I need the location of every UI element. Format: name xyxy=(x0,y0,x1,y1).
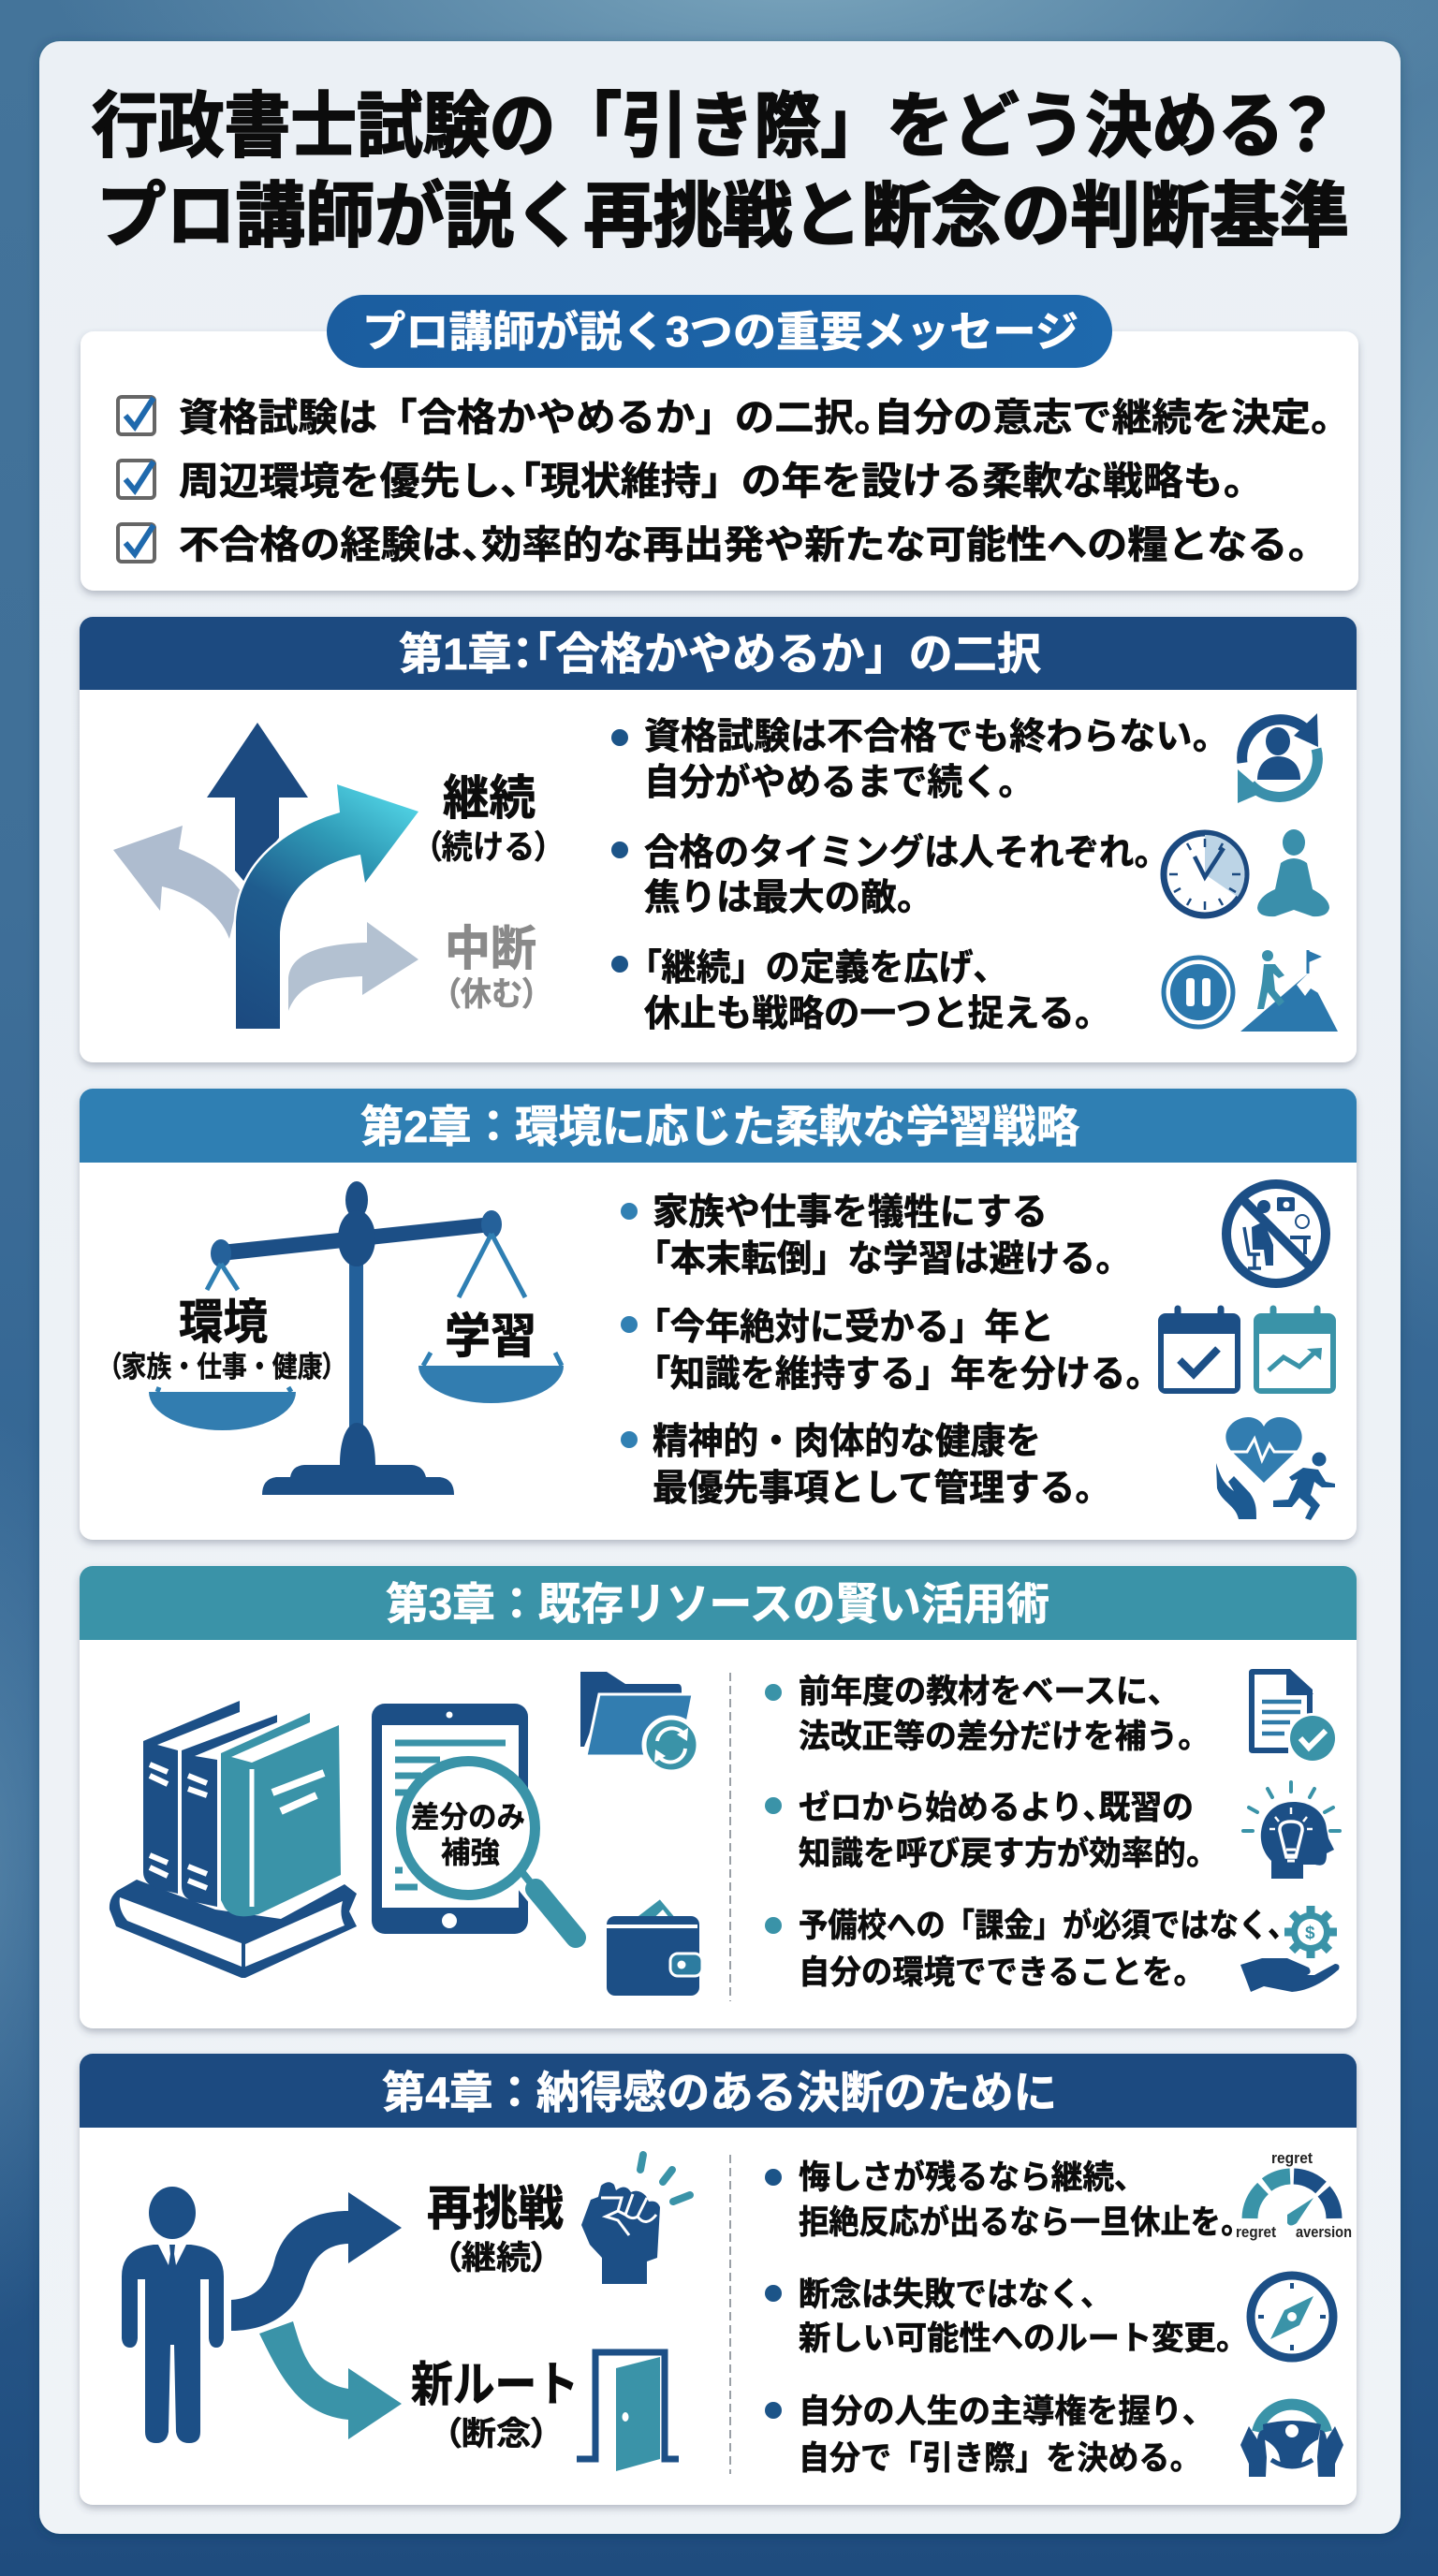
label: continue: （続ける） xyxy=(426,829,550,866)
chapter 1 card xyxy=(80,617,1357,1062)
icon: cycle person xyxy=(1238,713,1318,803)
label: pause xyxy=(445,922,538,1013)
bullet 3: 自分の人生の主導権を握り、 xyxy=(799,2393,1198,2430)
chapter 2 header: 第2章：環境に応じた柔軟な学習戦略 xyxy=(360,1102,1079,1151)
chapter 4 card xyxy=(80,2054,1357,2505)
label: retry xyxy=(427,2182,564,2276)
arrow: new route xyxy=(259,2321,402,2439)
bullet 1: 家族や仕事を犠牲にする xyxy=(653,1193,1048,1233)
bullet 1 xyxy=(765,2159,1236,2241)
icon: no sacrifice sign xyxy=(1226,1184,1326,1283)
chapter 2 header xyxy=(80,1089,1357,1163)
bullet 3 xyxy=(611,948,1093,1034)
icon: document check xyxy=(1249,1669,1338,1764)
bullet 2: 「今年絶対に受かる」年と xyxy=(653,1308,1054,1348)
bullet 3: 「継続」の定義を広げ、 xyxy=(644,948,990,988)
icon: wallet xyxy=(607,1898,702,1996)
chapter 1 header xyxy=(80,617,1357,690)
bullet 1: 「本末転倒」な学習は避ける。 xyxy=(653,1239,1113,1280)
bullet 1: 悔しさが残るなら継続、 xyxy=(799,2159,1130,2196)
label: new route: （断念） xyxy=(444,2416,549,2452)
chapter 3 card xyxy=(80,1566,1357,2028)
bullet 2: 知識を呼び戻す方が効率的。 xyxy=(799,1836,1202,1872)
bullet 2: 「知識を維持する」年を分ける。 xyxy=(653,1354,1143,1395)
panel: key messages xyxy=(81,295,1358,591)
label: environment: 環境 xyxy=(179,1295,268,1349)
label: retry: （継続） xyxy=(444,2240,549,2276)
bullet 3: 精神的・肉体的な健康を xyxy=(653,1422,1041,1462)
panel: chapter 2 xyxy=(80,1089,1357,1540)
icon: climber and mountain xyxy=(1240,950,1338,1032)
label: pause: 中断 xyxy=(445,922,536,975)
diagram: balance scale xyxy=(149,1181,564,1495)
divider xyxy=(729,1673,731,2001)
icon: calendar check xyxy=(1158,1309,1240,1394)
icon: gauge: regret xyxy=(1271,2149,1313,2167)
icon: folder sync xyxy=(580,1672,698,1772)
icon: person xyxy=(122,2187,224,2443)
label: study: 学習 xyxy=(445,1310,536,1363)
bullet 3 xyxy=(765,1908,1283,1991)
diagram: magnifier: 差分のみ xyxy=(411,1800,525,1834)
bullet 1: 法改正等の差分だけを補う。 xyxy=(799,1719,1194,1755)
bullet 2: 新しい可能性へのルート変更。 xyxy=(799,2320,1232,2357)
divider xyxy=(729,2155,731,2474)
bullet 3: 自分の環境でできることを。 xyxy=(799,1954,1189,1991)
label: new route xyxy=(411,2358,579,2452)
icon: pause xyxy=(1164,958,1233,1027)
bullet 3 xyxy=(765,2393,1198,2477)
bullet 2: 断念は失敗ではなく、 xyxy=(799,2276,1096,2313)
icon: head with lightbulb xyxy=(1243,1782,1340,1879)
bullet 2 xyxy=(621,1308,1143,1395)
icon: meditating person xyxy=(1257,829,1329,916)
bullet 2: ゼロから始めるより、既習の xyxy=(799,1790,1194,1826)
icon: hand and gear: $ xyxy=(1305,1924,1315,1943)
icon: steering wheel xyxy=(1240,2405,1343,2477)
diagram: magnifier: 補強 xyxy=(441,1836,500,1869)
icon: gauge: aversion xyxy=(1296,2223,1352,2241)
panel: chapter 4 xyxy=(80,2054,1357,2505)
bullet 3: 休止も戦略の一つと捉える。 xyxy=(644,994,1093,1034)
bullet 3: 最優先事項として管理する。 xyxy=(653,1469,1093,1509)
chapter 3 header xyxy=(80,1566,1357,1640)
icon: door xyxy=(577,2352,679,2471)
bullet 3: 予備校への「課金」が必須ではなく、 xyxy=(799,1908,1283,1944)
bullet 2 xyxy=(765,1790,1202,1872)
label: environment xyxy=(109,1295,335,1383)
title: 行政書士試験の「引き際」をどう決める？ xyxy=(92,87,1330,167)
bullet 3 xyxy=(621,1422,1093,1509)
diagram: tablet xyxy=(372,1704,528,1934)
icon: calendar chart xyxy=(1254,1309,1336,1394)
label: pause: （休む） xyxy=(445,976,538,1013)
bullet 2 xyxy=(765,2276,1232,2357)
label: continue: 継続 xyxy=(443,771,536,825)
bullet 2 xyxy=(611,833,1152,918)
pill heading: プロ講師が説く3つの重要メッセージ xyxy=(362,308,1078,356)
chapter 1 header: 第1章：「合格かやめるか」の二択 xyxy=(399,629,1041,679)
label: environment: （家族・仕事・健康） xyxy=(109,1351,335,1383)
icon: fist xyxy=(581,2155,690,2284)
pill heading xyxy=(327,295,1112,368)
diagram: magnifier xyxy=(398,1758,576,1938)
chapter 3 header: 第3章：既存リソースの賢い活用術 xyxy=(386,1579,1049,1629)
bullet 1 xyxy=(765,1674,1194,1755)
label: new route: 新ルート xyxy=(411,2358,579,2411)
bullet 1 xyxy=(611,717,1211,803)
bullet 1 xyxy=(621,1193,1113,1280)
icon: compass xyxy=(1251,2276,1333,2358)
label: continue xyxy=(426,771,550,866)
icon: heart and runner xyxy=(1216,1417,1335,1520)
bullet 1: 前年度の教材をベースに、 xyxy=(799,1674,1164,1710)
message 2: 周辺環境を優先し 、「現状維持」の年を設ける柔軟な戦略も 。 xyxy=(179,460,1243,503)
chapter 4 header xyxy=(80,2054,1357,2128)
diagram: stacked books xyxy=(110,1701,357,1978)
arrow: retry xyxy=(231,2192,402,2331)
message 1: 資格試験は「合格かやめるか」の二択 。自分の意志で継続を決定 。 xyxy=(179,396,1330,439)
icon: hand and gear xyxy=(1240,1906,1339,1992)
bullet 1: 拒絶反応が出るなら一旦休止を。 xyxy=(799,2204,1236,2241)
panel: chapter 3 xyxy=(80,1566,1357,2028)
icon: gauge xyxy=(1236,2149,1352,2241)
chapter 2 card xyxy=(80,1089,1357,1540)
message 3: 不合格の経験は 、効率的な再出発や新たな可能性への糧となる 。 xyxy=(179,523,1308,566)
chapter 4 header: 第4章：納得感のある決断のために xyxy=(382,2068,1057,2117)
title: プロ講師が説く再挑戦と断念の判断基準 xyxy=(96,177,1349,256)
label: retry: 再挑戦 xyxy=(427,2182,564,2235)
bullet 1: 自分がやめるまで続く。 xyxy=(644,763,1016,803)
bullet 3: 自分で「引き際」を決める。 xyxy=(799,2440,1185,2477)
diagram: forked arrows xyxy=(113,723,418,1029)
bullet 2: 合格のタイミングは人それぞれ。 xyxy=(644,833,1152,873)
title xyxy=(92,87,1349,256)
icon: clock xyxy=(1164,833,1246,915)
bullet 2: 焦りは最大の敵。 xyxy=(644,878,915,918)
icon: gauge: regret xyxy=(1236,2223,1276,2241)
card xyxy=(81,331,1358,591)
panel: chapter 1 xyxy=(80,617,1357,1062)
bullet 1: 資格試験は不合格でも終わらない。 xyxy=(644,717,1211,757)
